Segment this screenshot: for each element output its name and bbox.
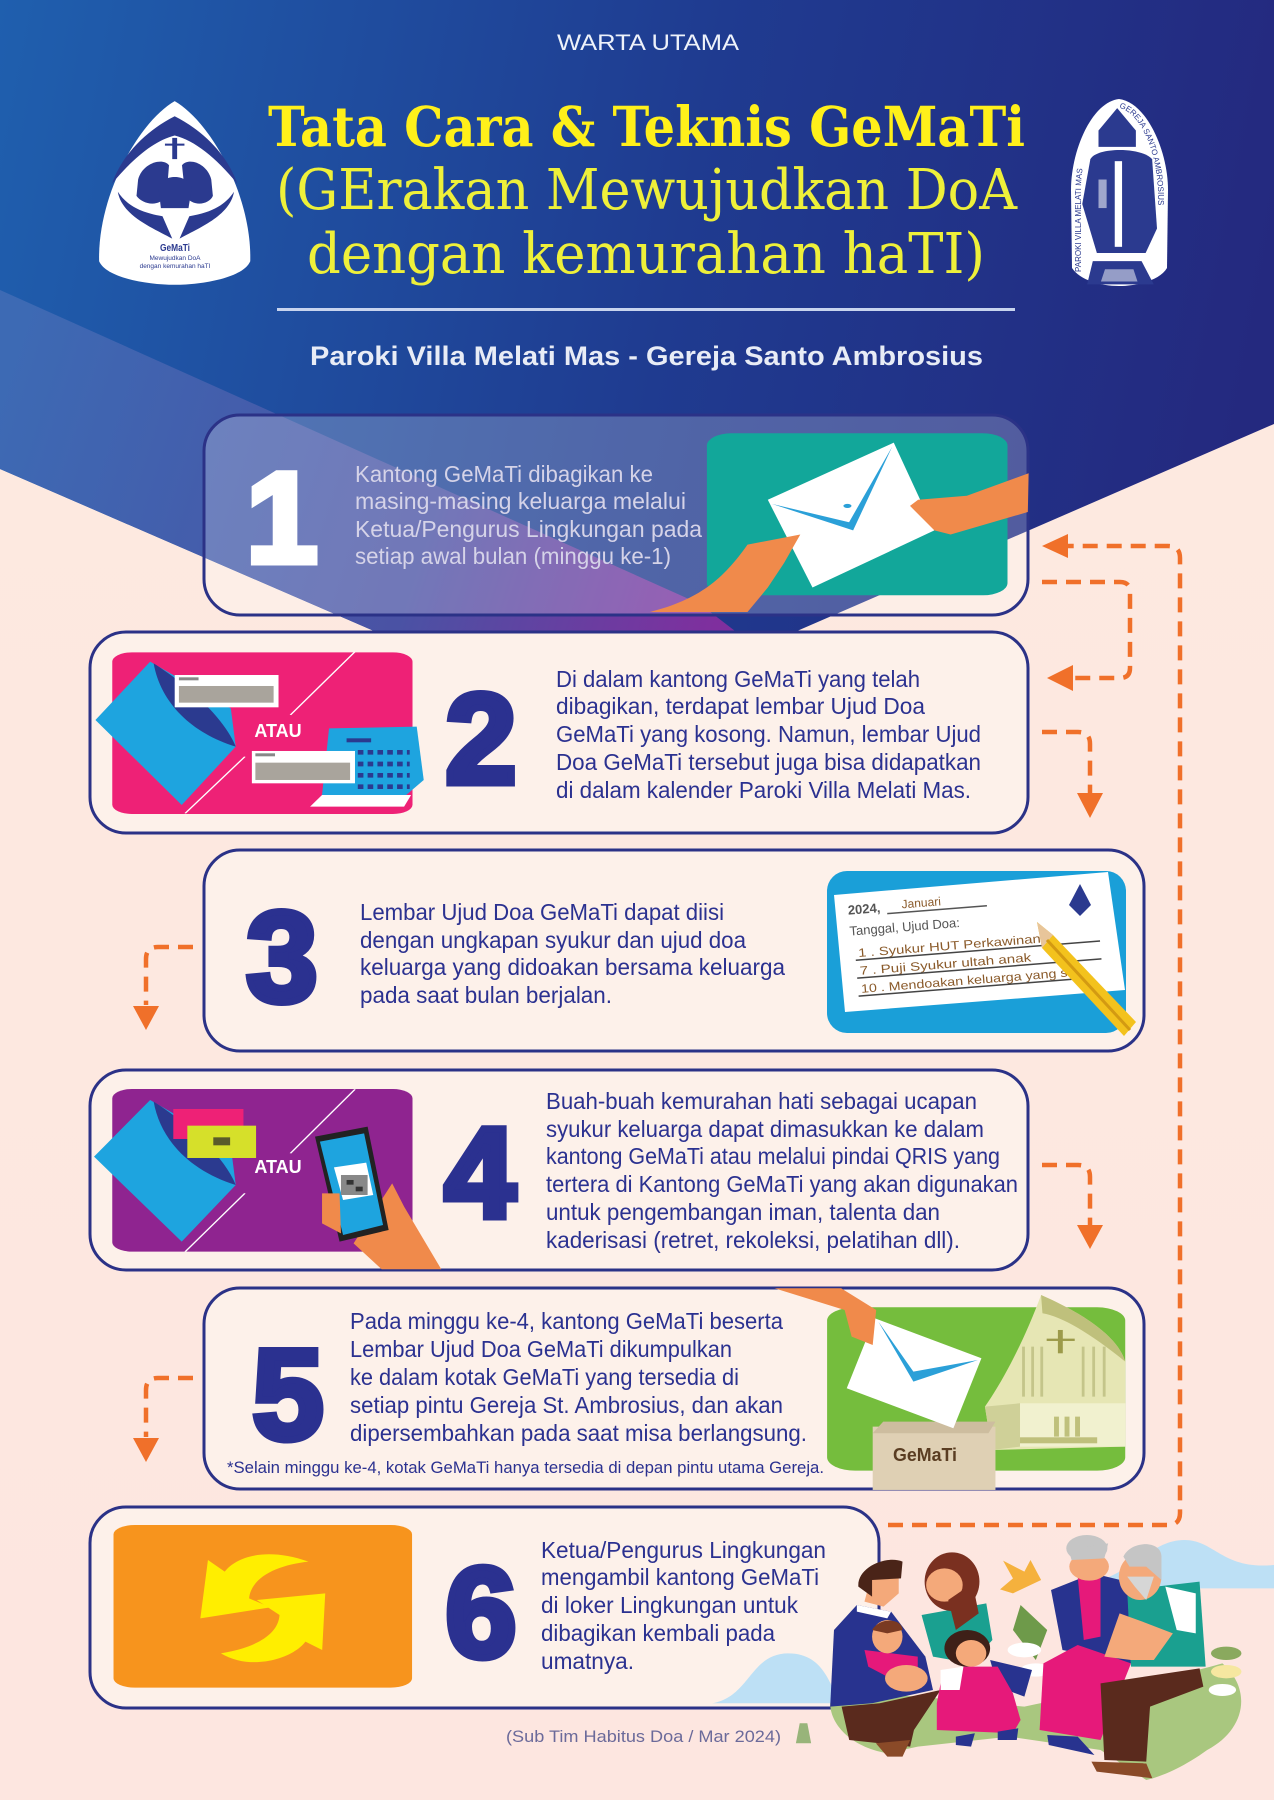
step 5 text [350, 1308, 807, 1446]
step 6 text: Ketua/Pengurus Lingkungan [541, 1537, 826, 1563]
step 3 illustration: prayer sheet and pencil: 2024, [847, 900, 881, 918]
subtitle: Paroki Villa Melati Mas - Gereja Santo Ambrosius [310, 341, 983, 371]
arrow: step 4 to step 5 [1042, 1165, 1103, 1249]
step 4 text: Buah-buah kemurahan hati sebagai ucapan [546, 1088, 977, 1114]
step 1 text: Ketua/Pengurus Lingkungan pada [355, 516, 702, 542]
step 1 text [355, 461, 702, 569]
step 4 text: kaderisasi (retret, rekoleksi, pelatihan dll). [546, 1227, 960, 1253]
step 4 text: syukur keluarga dapat dimasukkan ke dalam [546, 1116, 984, 1142]
arrow: step 2 to step 3 [1042, 732, 1103, 818]
logo: Gereja Santo Ambrosius: GEREJA SANTO AMBROSIUS [1120, 103, 1164, 205]
step 6 number: 6 [445, 1542, 517, 1685]
step 4 illustration: envelope or QRIS [94, 1089, 441, 1269]
step 5 card: GeMaTi [893, 1445, 957, 1465]
step 6 text [541, 1537, 826, 1674]
step 5 text: Pada minggu ke-4, kantong GeMaTi beserta [350, 1308, 783, 1334]
step 2 number: 2 [445, 668, 517, 811]
step 3 illustration: prayer sheet and pencil: Januari [901, 894, 941, 911]
title: (GErakan Mewujudkan DoA [276, 158, 1018, 223]
mother [922, 1552, 992, 1663]
header divider [277, 308, 1015, 311]
step 5 text: ke dalam kotak GeMaTi yang tersedia di [350, 1364, 739, 1390]
step 1 text: setiap awal bulan (minggu ke-1) [355, 543, 671, 569]
step 6 card [90, 1507, 879, 1708]
title: Tata Cara & Teknis GeMaTi [268, 94, 1025, 159]
step 2 text: dibagikan, terdapat lembar Ujud Doa [556, 693, 925, 719]
arrow: step 1 to step 2 [1042, 582, 1130, 691]
logo: GeMaTi: Mewujudkan DoA [150, 255, 201, 262]
daughter [937, 1630, 1032, 1747]
logo: Gereja Santo Ambrosius [1071, 99, 1168, 286]
step 2 text: Doa GeMaTi tersebut juga bisa didapatkan [556, 749, 981, 775]
section label: WARTA UTAMA [557, 30, 739, 55]
step 4 card: ATAU [254, 1157, 302, 1177]
step 3 text [360, 899, 785, 1008]
step 6 text: di loker Lingkungan untuk [541, 1592, 798, 1618]
arrow: step 3 to step 4 [133, 947, 193, 1030]
step 4 text: kantong GeMaTi atau melalui pindai QRIS yang [546, 1143, 1000, 1169]
flow arrows [133, 534, 1180, 1525]
credit line: (Sub Tim Habitus Doa / Mar 2024) [506, 1727, 781, 1746]
step 3 text: pada saat bulan berjalan. [360, 982, 612, 1008]
logo: GeMaTi [99, 101, 250, 285]
grandmother [1040, 1535, 1131, 1755]
step 2 text: Di dalam kantong GeMaTi yang telah [556, 666, 920, 692]
step 6 illustration: yellow cycle arrows [114, 1525, 412, 1688]
step 5 text: setiap pintu Gereja St. Ambrosius, dan akan [350, 1392, 783, 1418]
step 3 card [204, 850, 1144, 1051]
step 2 text [556, 666, 981, 803]
step 3 text: Lembar Ujud Doa GeMaTi dapat diisi [360, 899, 724, 925]
step 4 text: untuk pengembangan iman, talenta dan [546, 1199, 940, 1225]
step 2 card: ATAU [254, 721, 302, 741]
step 3 illustration: prayer sheet and pencil: 1 . Syukur HUT Perkawinan [858, 932, 1041, 960]
step 5 number: 5 [252, 1324, 324, 1467]
step 3 illustration: prayer sheet and pencil: Tanggal, Ujud Doa: [849, 915, 960, 939]
step 6 text: dibagikan kembali pada [541, 1620, 775, 1646]
step 5 illustration: envelope, box and church [774, 1288, 1125, 1490]
step 6 text: mengambil kantong GeMaTi [541, 1564, 819, 1590]
blue header background [0, 0, 1274, 631]
step 4 text: tertera di Kantong GeMaTi yang akan digunakan [546, 1171, 1018, 1197]
title: dengan kemurahan haTI) [307, 222, 985, 287]
father with child [830, 1560, 941, 1757]
step 5 text: Lembar Ujud Doa GeMaTi dikumpulkan [350, 1336, 732, 1362]
logo: GeMaTi: dengan kemurahan haTI [140, 263, 211, 270]
arrow: step 5 to step 6 [133, 1378, 193, 1462]
step 5 card [204, 1288, 1144, 1490]
step 3 number: 3 [246, 886, 318, 1029]
step 6 text: umatnya. [541, 1648, 634, 1674]
logo: GeMaTi: GeMaTi [160, 243, 190, 254]
step 4 number: 4 [444, 1102, 516, 1245]
step 3 illustration: prayer sheet and pencil [827, 871, 1136, 1036]
step 5 footnote: *Selain minggu ke-4, kotak GeMaTi hanya tersedia di depan pintu utama Gereja. [227, 1458, 824, 1477]
bird [1000, 1560, 1041, 1593]
small sprig [796, 1723, 811, 1743]
step 3 illustration: prayer sheet and pencil: 7 . Puji Syukur ultah anak [859, 950, 1033, 978]
step 5 text: dipersembahkan pada saat misa berlangsung. [350, 1420, 807, 1446]
step 2 illustration: envelope or calendar [95, 652, 424, 814]
step 4 card [90, 1070, 1028, 1270]
step 3 text: keluarga yang didoakan bersama keluarga [360, 954, 785, 980]
step 4 text [546, 1088, 1018, 1253]
step 1 text: masing-masing keluarga melalui [355, 488, 686, 514]
step 1 card [204, 415, 1029, 615]
step 2 card [90, 632, 1028, 833]
step 1 text: Kantong GeMaTi dibagikan ke [355, 461, 653, 487]
arrow: step 6 back to step 1 [888, 534, 1180, 1525]
step 1 illustration: envelope handover [650, 433, 1029, 612]
step 3 text: dengan ungkapan syukur dan ujud doa [360, 927, 746, 953]
illustration: family praying [712, 1535, 1274, 1780]
step 2 text: GeMaTi yang kosong. Namun, lembar Ujud [556, 721, 981, 747]
grandfather [1091, 1544, 1206, 1778]
title [268, 94, 1025, 287]
step 2 text: di dalam kalender Paroki Villa Melati Mas. [556, 777, 971, 803]
logo: Gereja Santo Ambrosius: PAROKI VILLA MELATI MAS [1075, 168, 1082, 272]
step 3 illustration: prayer sheet and pencil: 10 . Mendoakan keluarga yang s [861, 966, 1068, 996]
step 1 number: 1 [246, 447, 318, 590]
